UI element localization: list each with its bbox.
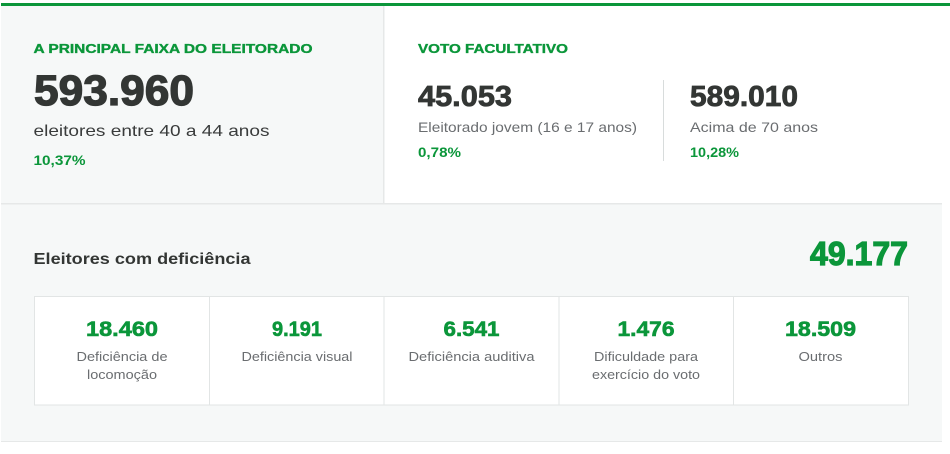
number: 589.010: 589.010 [690,81,798,113]
number: 593.960: 593.960 [34,67,194,115]
cell: auditiva: Deficiência auditiva [408,350,535,364]
cell: visual: Deficiência visual [242,350,352,364]
percent: 10,28%: 10,28% [690,145,739,160]
cell: locomocao: locomoção [87,368,157,382]
heading: voto facultativo: VOTO FACULTATIVO [418,42,568,56]
text: acima de 70 anos: Acima de 70 anos [690,119,818,135]
cell: auditiva [408,318,535,364]
cell: outros: 18.509 [785,318,856,341]
cell: locomocao: 18.460 [86,318,158,341]
text: faixa etaria: eleitores entre 40 a 44 anos [34,123,270,140]
cell: locomocao: Deficiência de [76,350,168,364]
cell: auditiva: 6.541 [444,318,500,341]
table: tipos de deficiencia [34,296,908,405]
cell: dificuldade: Dificuldade para [594,350,698,364]
cell: dificuldade [592,318,700,382]
cell: outros: Outros [798,350,842,364]
percent: 10,37%: 10,37% [34,152,86,168]
panel: voto facultativo [418,42,818,161]
percent: 0,78%: 0,78% [418,145,461,160]
panel: eleitores com deficiencia [1,203,942,442]
number: 49.177: 49.177 [810,235,908,272]
text: eleitorado jovem: Eleitorado jovem (16 e 17 anos) [418,119,637,135]
number: 45.053: 45.053 [418,81,512,113]
cell: visual: 9.191 [272,318,322,341]
cell: visual [242,318,352,364]
cell: outros [785,318,856,364]
heading: eleitores com deficiencia: Eleitores com deficiência [34,251,251,268]
cell: dificuldade: 1.476 [618,318,674,341]
cell: locomocao [76,318,168,382]
panel: principal faixa [1,6,384,203]
cell: dificuldade: exercício do voto [592,368,700,382]
top green bar [1,3,950,6]
heading: principal faixa: A PRINCIPAL FAIXA DO ELEITORADO [34,42,313,56]
